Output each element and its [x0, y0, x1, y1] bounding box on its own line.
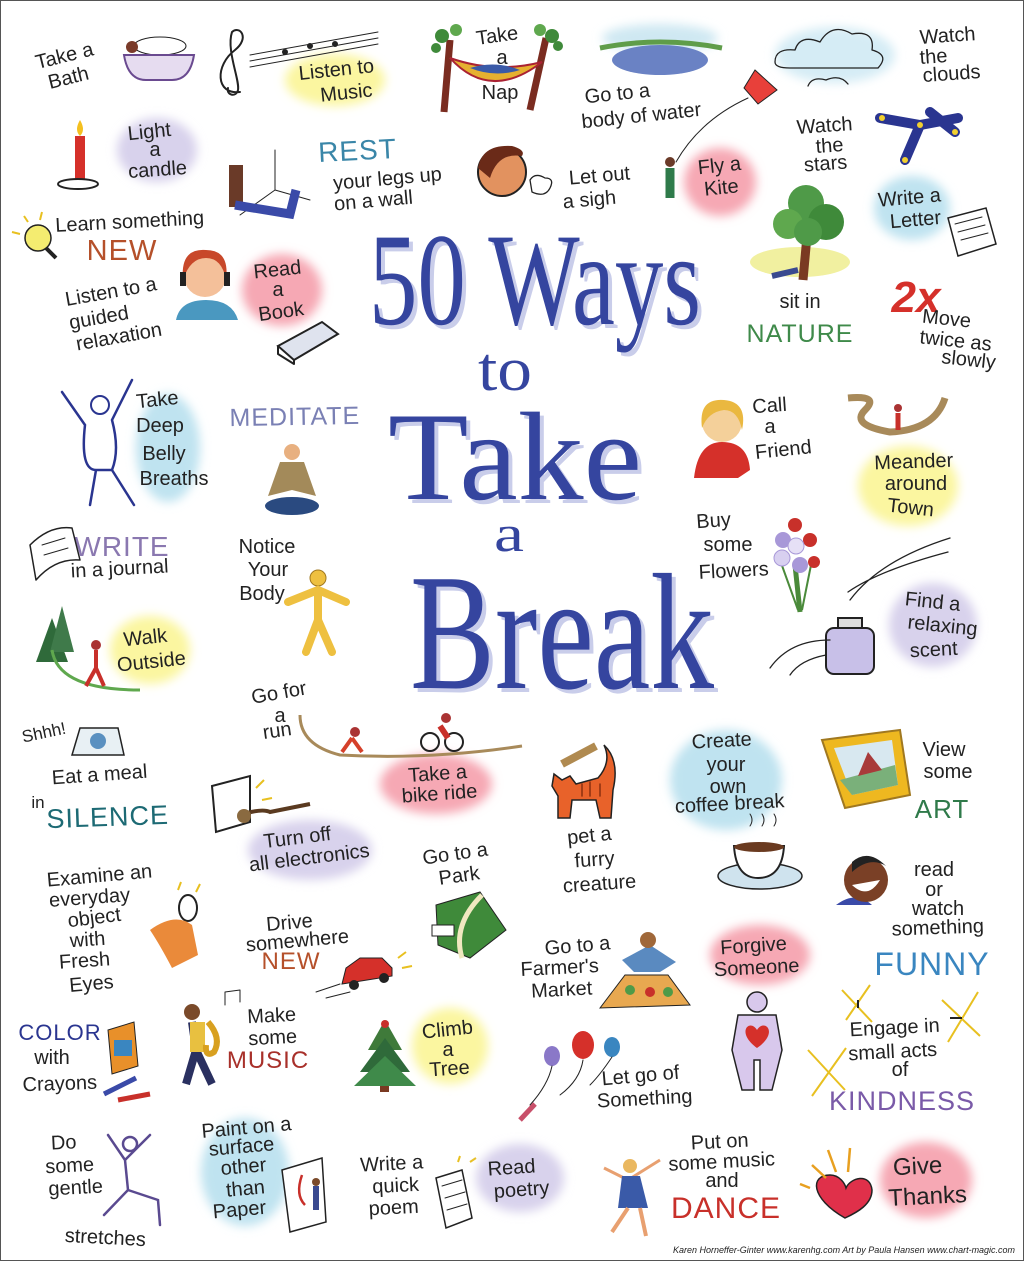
icon: bathtub	[124, 37, 194, 80]
item: put on some music and dance: and	[705, 1170, 739, 1192]
title: to	[478, 336, 532, 404]
item: examine an everyday object with fresh eyes: Examine an	[46, 860, 153, 892]
item: go for a run and take a bike ride: bike ride	[401, 780, 478, 808]
item: give thanks	[800, 1142, 972, 1218]
item: put on some music and dance: some music	[668, 1148, 776, 1176]
item: engage in small acts of kindness: KINDNESS	[829, 1086, 975, 1116]
icon: balloons	[520, 1031, 620, 1120]
item: climb a tree	[354, 1008, 488, 1092]
item: listen to music	[221, 30, 385, 107]
icon: bouquet	[774, 518, 820, 612]
item: take a nap	[431, 22, 563, 112]
item: go to a farmer's market	[520, 932, 690, 1008]
icon: letter	[948, 208, 996, 256]
item: light a candle: candle	[127, 157, 188, 183]
item: fly a kite: Fly a	[697, 153, 743, 179]
item: view some art	[822, 730, 972, 824]
icon: orange cat and hand	[552, 745, 615, 818]
item: watch the stars: stars	[803, 152, 848, 176]
item: create your own coffee break: Create	[691, 728, 752, 754]
icon: clouds	[775, 27, 895, 86]
item: find a relaxing scent: Find a	[904, 588, 962, 616]
item: write in a journal	[30, 528, 170, 583]
item: read a book	[242, 254, 338, 364]
icon: winding path	[848, 398, 945, 432]
item: take a nap: Take	[475, 22, 520, 50]
item: make some music: MUSIC	[227, 1047, 309, 1074]
item: call a friend	[694, 394, 813, 478]
item: learn something new: NEW	[87, 235, 157, 267]
item: let go of something	[520, 1031, 693, 1120]
item: read poetry: Read	[487, 1155, 536, 1181]
item: put on some music and dance: DANCE	[671, 1192, 781, 1225]
item: let go of something: Something	[596, 1086, 693, 1112]
item: take a bath: Bath	[46, 63, 91, 94]
item: go to a park: Go to a	[421, 838, 490, 870]
item: rest your legs up on a wall: on a wall	[333, 187, 414, 215]
item: paint on a surface other than paper: Paint on a	[201, 1113, 293, 1143]
icon: runner and cyclist on path	[300, 713, 522, 756]
item: write a quick poem	[360, 1151, 476, 1228]
item: make some music: Make	[247, 1004, 297, 1028]
item: move twice as slowly: twice as	[919, 326, 993, 356]
item: read or watch something funny: something	[891, 915, 984, 941]
icon: head sighing	[478, 146, 552, 196]
item: climb a tree: a	[442, 1039, 454, 1061]
item: engage in small acts of kindness: of	[892, 1059, 909, 1081]
item: read a book: a	[272, 279, 284, 301]
item: do some gentle stretches	[45, 1131, 160, 1251]
item: meander around town: Town	[886, 495, 935, 521]
icon: star constellation	[879, 112, 958, 163]
item: meander around town: around	[885, 473, 947, 495]
icon: painter at canvas	[282, 1158, 326, 1232]
item: meditate: MEDITATE	[229, 402, 360, 432]
item: watch the stars	[796, 112, 958, 176]
item: listen to a guided relaxation: Listen to a	[64, 273, 159, 311]
item: take deep belly breaths	[62, 380, 208, 505]
item: eat a meal in silence: Shhh!	[20, 719, 68, 747]
item: find a relaxing scent: scent	[909, 638, 959, 662]
icon: poem page	[436, 1156, 476, 1228]
icon: heart with rays	[800, 1148, 872, 1218]
item: do some gentle stretches: gentle	[48, 1176, 103, 1200]
item: go to a farmer's market: Market	[531, 977, 593, 1003]
item: find a relaxing scent	[770, 538, 979, 675]
icon: person with legs on wall	[229, 150, 310, 215]
item: walk outside	[36, 606, 190, 690]
item: view some art: View	[922, 739, 966, 761]
title: 50 Ways	[373, 210, 705, 357]
item: eat a meal in silence: in	[31, 793, 45, 812]
item: examine an everyday object with fresh eyes: everyday	[48, 884, 131, 912]
icon: hammock and trees	[431, 24, 563, 112]
item: sit in nature: sit in	[779, 291, 821, 313]
item: drive somewhere new: Drive	[265, 910, 314, 936]
item: write in a journal: in a journal	[70, 555, 169, 583]
item: go to a body of water	[581, 24, 722, 133]
item: meditate	[229, 402, 360, 515]
item: do some gentle stretches: stretches	[64, 1225, 146, 1251]
item: examine an everyday object with fresh eyes	[46, 860, 200, 997]
item: create your own coffee break: your	[707, 754, 746, 776]
item: walk outside: Outside	[116, 647, 187, 677]
icon: trees and walker	[36, 606, 140, 690]
item: view some art: some	[924, 761, 972, 783]
item: meander around town: Meander	[874, 450, 954, 474]
item: notice your body: Notice	[239, 536, 295, 558]
item: go to a farmer's market: Go to a	[544, 932, 612, 960]
item: light a candle	[58, 118, 197, 189]
icon: light bulb	[12, 212, 56, 258]
icon: woman on phone	[694, 400, 750, 478]
item: notice your body: Body	[239, 583, 285, 605]
title: Take	[392, 392, 646, 531]
icon: book	[278, 322, 338, 364]
item: go for a run and take a bike ride: Take a	[407, 761, 469, 787]
item: color with crayons: with	[33, 1047, 70, 1069]
item: call a friend: a	[764, 416, 776, 438]
item: engage in small acts of kindness: small acts	[848, 1039, 938, 1065]
item: eat a meal in silence: Eat a meal	[51, 761, 148, 789]
item: eat a meal in silence: SILENCE	[46, 800, 169, 834]
item: take deep belly breaths: Breaths	[140, 468, 208, 490]
item: turn off all electronics: Turn off	[262, 823, 333, 853]
icon: red car	[316, 952, 412, 998]
item: go for a run and take a bike ride: Go for	[250, 677, 309, 709]
item: read a book: Book	[257, 298, 306, 326]
icon: laughing face	[836, 856, 888, 905]
item: paint on a surface other than paper	[201, 1113, 326, 1232]
item: sit in nature: NATURE	[747, 320, 853, 348]
item: notice your body	[239, 536, 346, 652]
item: forgive someone	[710, 925, 810, 985]
credits: Karen Horneffer-Ginter www.karenhg.com Art by Paula Hansen www.chart-magic.com	[673, 1245, 1015, 1255]
item: write a quick poem: poem	[368, 1196, 419, 1220]
item: buy some flowers: Buy	[696, 509, 732, 533]
item: write a letter: Letter	[889, 207, 942, 233]
item: listen to a guided relaxation: relaxation	[74, 319, 164, 355]
item: turn off all electronics	[212, 776, 372, 880]
item: let go of something: Let go of	[601, 1062, 681, 1090]
icon: sparkles	[808, 985, 980, 1096]
item: write a quick poem: quick	[372, 1174, 421, 1198]
item: read poetry: poetry	[493, 1177, 550, 1203]
icon: scent bottle with swirls	[770, 538, 950, 675]
item: write in a journal: WRITE	[74, 531, 170, 562]
title	[369, 206, 718, 728]
icon: treble clef and staff	[221, 30, 378, 95]
item: read poetry	[476, 1144, 564, 1212]
item: read or watch something funny: read	[914, 859, 954, 881]
item: watch the stars: Watch	[796, 113, 853, 139]
item: color with crayons	[18, 1020, 150, 1100]
icon: red candle	[58, 120, 98, 189]
item: meander around town	[848, 398, 958, 526]
item: write a quick poem: Write a	[360, 1151, 425, 1177]
item: make some music: some	[248, 1026, 298, 1050]
item: move twice as slowly: Move	[921, 306, 972, 333]
title: a	[494, 506, 524, 563]
item: take a nap: a	[496, 47, 508, 69]
item: rest your legs up on a wall: your legs up	[332, 163, 443, 195]
item: go to a body of water: Go to a	[584, 80, 652, 108]
item: climb a tree: Tree	[429, 1057, 470, 1081]
item: go for a run and take a bike ride	[250, 677, 522, 814]
item: listen to music: Music	[319, 79, 373, 107]
item: make some music	[184, 990, 309, 1084]
item: listen to a guided relaxation: guided	[67, 302, 130, 334]
icon: yellow body figure	[288, 570, 346, 652]
item: take a nap: Nap	[482, 82, 518, 104]
icon: tree with person	[750, 185, 850, 280]
icon: dancing woman	[604, 1159, 660, 1236]
item: read or watch something funny: FUNNY	[874, 946, 990, 982]
item: paint on a surface other than paper: surface	[208, 1133, 275, 1161]
item: view some art: ART	[915, 794, 969, 824]
item: watch the clouds: Watch	[919, 23, 976, 49]
item: pet a furry creature: pet a	[566, 823, 614, 849]
icon: saxophone player	[184, 990, 240, 1084]
item: put on some music and dance: Put on	[690, 1130, 749, 1155]
item: create your own coffee break: own	[710, 776, 746, 798]
item: listen to a guided relaxation	[64, 250, 238, 355]
item: find a relaxing scent: relaxing	[907, 611, 979, 641]
item: create your own coffee break	[670, 728, 802, 889]
item: call a friend: Call	[752, 394, 788, 418]
item: take a bath: Take a	[33, 38, 97, 74]
icon: stretching figure	[104, 1135, 160, 1225]
item: watch the clouds: clouds	[922, 61, 981, 87]
item: color with crayons: Crayons	[22, 1072, 97, 1096]
item: paint on a surface other than paper: than	[225, 1176, 266, 1202]
item: write a letter: Write a	[877, 184, 943, 212]
item: fly a kite: Kite	[703, 175, 740, 201]
item: examine an everyday object with fresh eyes: object	[66, 904, 123, 932]
icon: market stall	[600, 932, 690, 1008]
item: buy some flowers	[696, 509, 820, 612]
item: paint on a surface other than paper: Paper	[212, 1197, 267, 1223]
item: sit in nature	[747, 185, 853, 348]
item: pet a furry creature: furry	[574, 848, 615, 872]
item: forgive someone: Someone	[713, 955, 800, 981]
item: take deep belly breaths: Take	[135, 387, 180, 413]
item: walk outside: Walk	[122, 625, 169, 651]
item: put on some music and dance	[604, 1130, 781, 1236]
item: turn off all electronics: all electronics	[248, 840, 371, 876]
item: do some gentle stretches: Do	[50, 1131, 77, 1155]
item: heart person	[732, 992, 782, 1090]
title: Take	[388, 388, 642, 527]
item: take deep belly breaths: Belly	[142, 443, 186, 465]
icon: coffee cup	[718, 814, 802, 889]
item: color with crayons: COLOR	[18, 1020, 102, 1045]
item: let out a sigh: Let out	[568, 162, 631, 190]
item: call a friend: Friend	[754, 436, 813, 464]
item: notice your body: Your	[248, 559, 289, 581]
item: examine an everyday object with fresh eyes: Fresh	[58, 948, 111, 974]
title: Break	[410, 540, 714, 724]
icon: place setting	[72, 728, 124, 755]
item: pet a furry creature: creature	[562, 870, 637, 898]
item: light a candle: Light	[127, 119, 173, 145]
item: read or watch something funny	[836, 856, 990, 982]
item: drive somewhere new	[245, 910, 412, 998]
item: drive somewhere new: NEW	[262, 948, 320, 975]
item: go to a farmer's market: Farmer's	[520, 955, 599, 981]
item: let out a sigh	[478, 146, 631, 213]
item: rest your legs up on a wall	[229, 133, 443, 215]
item: give thanks: Thanks	[888, 1181, 968, 1212]
item: read or watch something funny: or	[925, 879, 943, 901]
item: let out a sigh: a sigh	[562, 187, 617, 213]
icon: person with headphones	[176, 250, 238, 320]
item: engage in small acts of kindness: Engage in	[849, 1015, 940, 1041]
item: fly a kite	[665, 70, 777, 216]
item: create your own coffee break: coffee break	[674, 790, 786, 818]
item: buy some flowers: some	[704, 534, 752, 556]
item: learn something new: Learn something	[55, 207, 205, 237]
item: move twice as slowly: slowly	[940, 346, 997, 374]
icon: meditating person	[265, 444, 319, 515]
item: eat a meal in silence	[20, 719, 169, 834]
item: pet a furry creature	[552, 745, 637, 898]
item: drive somewhere new: somewhere	[245, 926, 350, 956]
item: take a bath	[33, 37, 194, 94]
icon: kite and flyer	[665, 70, 777, 198]
icon: crayon box	[104, 1022, 150, 1100]
item: read or watch something funny: watch	[911, 898, 964, 920]
item: watch the clouds	[775, 23, 981, 87]
item: learn something new	[12, 207, 205, 267]
icon: plug and outlet	[212, 776, 310, 832]
icon: stretching figure	[62, 380, 134, 505]
item: go to a body of water: body of water	[581, 99, 703, 133]
item: move twice as slowly: 2x	[891, 273, 942, 322]
icon: hand holding object	[150, 882, 200, 968]
item: buy some flowers: Flowers	[698, 558, 769, 584]
item: go to a park	[421, 838, 506, 958]
icon: open journal	[30, 528, 80, 580]
icon: park scene	[432, 892, 506, 958]
item: go for a run and take a bike ride: a	[274, 705, 286, 727]
item: give thanks: Give	[892, 1152, 943, 1181]
item: watch the stars: the	[815, 134, 844, 158]
item: write a letter	[874, 176, 996, 256]
icon: pine tree	[354, 1020, 416, 1092]
item: paint on a surface other than paper: other	[220, 1154, 267, 1180]
title: Break	[414, 544, 718, 728]
item: go to a park: Park	[437, 862, 482, 890]
item: read a book: Read	[252, 257, 302, 283]
icon: lake	[600, 24, 722, 75]
icon: framed picture	[822, 730, 910, 808]
item: light a candle: a	[149, 139, 161, 161]
item: do some gentle stretches: some	[45, 1154, 95, 1178]
item: forgive someone: Forgive	[720, 933, 788, 959]
item: take deep belly breaths: Deep	[136, 415, 184, 437]
item: go for a run and take a bike ride: run	[261, 718, 293, 744]
item: examine an everyday object with fresh eyes: Eyes	[68, 971, 115, 997]
item: move twice as slowly	[891, 273, 997, 374]
title: 50 Ways	[369, 206, 701, 353]
item: examine an everyday object with fresh eyes: with	[68, 928, 106, 952]
item: listen to music: Listen to	[298, 55, 375, 85]
item: watch the clouds: the	[919, 45, 948, 69]
item: engage in small acts of kindness	[808, 985, 980, 1116]
item: rest your legs up on a wall: REST	[317, 133, 398, 168]
item: climb a tree: Climb	[421, 1016, 474, 1044]
